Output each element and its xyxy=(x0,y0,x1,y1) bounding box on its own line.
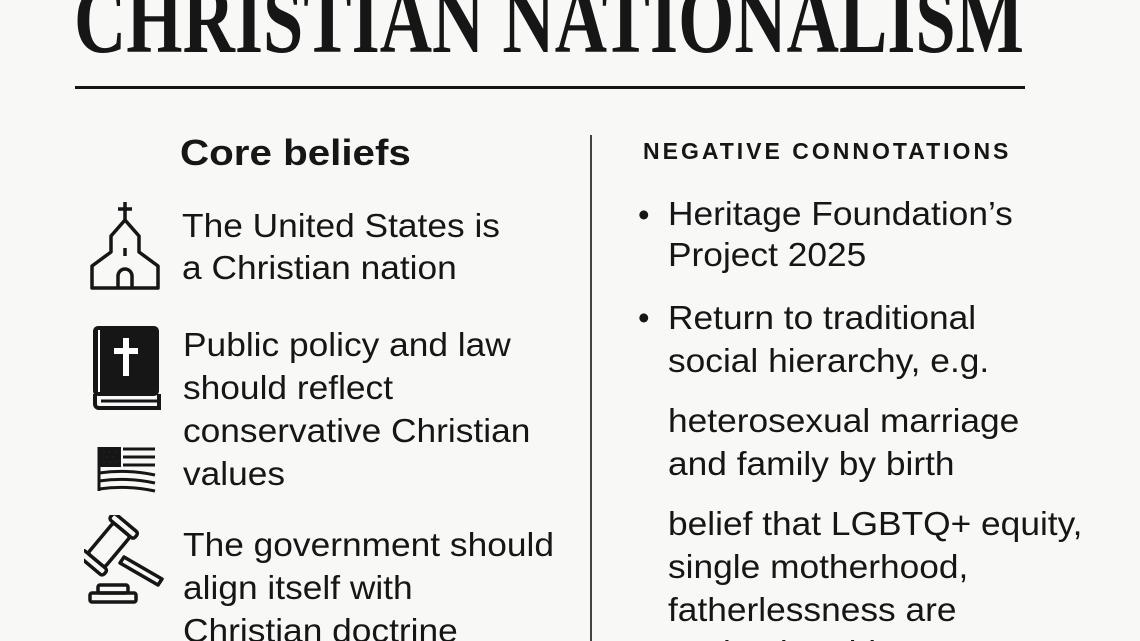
bullet 1: Heritage Foundation’s xyxy=(668,195,1013,232)
icon: bible xyxy=(93,326,161,410)
divider xyxy=(590,135,592,641)
icon: gavel xyxy=(84,515,164,604)
text: belief 3: align itself with xyxy=(183,569,413,606)
bullet 2: Return to traditional xyxy=(668,299,976,336)
sub-item: marriage: heterosexual marriage xyxy=(668,402,1019,439)
text: belief 2 xyxy=(183,326,530,492)
sub-item: LGBTQ: single motherhood, xyxy=(668,548,968,585)
panel: core beliefs xyxy=(84,132,554,641)
text: belief 2: should reflect xyxy=(183,369,393,406)
heading: negative connotations: NEGATIVE CONNOTATIONS xyxy=(643,138,1011,164)
text: belief 1 xyxy=(182,207,500,286)
sub-item: marriage xyxy=(668,402,1019,482)
bullet 1: • xyxy=(638,196,650,233)
text: belief 2: values xyxy=(183,455,285,492)
sub-item: marriage: and family by birth xyxy=(668,445,955,482)
sub-item: LGBTQ: belief that LGBTQ+ equity, xyxy=(668,505,1082,542)
bullet 2: • xyxy=(638,299,650,336)
title underline xyxy=(75,86,1025,89)
bullet 1: Project 2025 xyxy=(668,236,866,273)
panel: negative connotations xyxy=(638,138,1082,641)
sub-item: LGBTQ: fatherlessness are xyxy=(668,591,957,628)
text: belief 3 xyxy=(183,526,554,641)
icon: flag xyxy=(98,447,156,492)
text: belief 1: a Christian nation xyxy=(182,249,457,286)
heading: core beliefs: Core beliefs xyxy=(180,132,411,173)
bullet 2: social hierarchy, e.g. xyxy=(668,342,989,379)
sub-item: LGBTQ xyxy=(668,505,1082,641)
text: belief 3: The government should xyxy=(183,526,554,563)
text: belief 1: The United States is xyxy=(182,207,500,244)
icon: church xyxy=(90,202,160,290)
bullet 2 xyxy=(638,299,989,379)
text: belief 2: Public policy and law xyxy=(183,326,511,363)
text: belief 2: conservative Christian xyxy=(183,412,530,449)
bullet 1 xyxy=(638,195,1013,273)
